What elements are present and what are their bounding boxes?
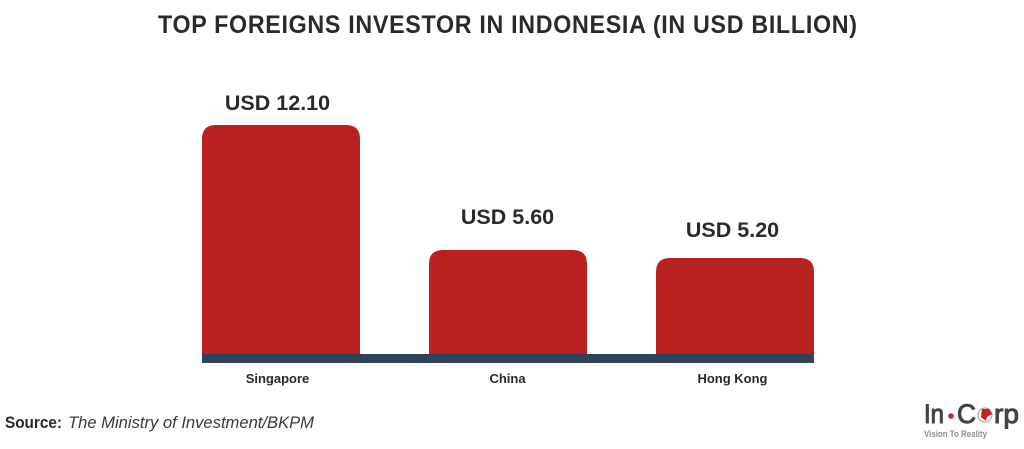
source label: Source: bbox=[5, 413, 62, 432]
value label: Singapore: USD 12.10 bbox=[225, 91, 330, 115]
logo letters rp: rp bbox=[994, 399, 1019, 429]
logo letter C: C bbox=[957, 399, 976, 429]
icon: globe bbox=[978, 408, 992, 422]
source name: The Ministry of Investment/BKPM bbox=[68, 413, 315, 432]
source note bbox=[5, 413, 315, 432]
logo: InCorp bbox=[924, 399, 1019, 440]
logo red dot bbox=[948, 413, 954, 419]
logo tagline: Vision To Reality bbox=[924, 429, 988, 440]
logo letters In: In bbox=[924, 399, 944, 429]
value label: Hong Kong: USD 5.20 bbox=[686, 218, 779, 242]
axis baseline bbox=[202, 354, 814, 363]
bar: China bbox=[429, 250, 587, 354]
category label: China: China bbox=[489, 371, 526, 386]
category label: Hong Kong: Hong Kong bbox=[697, 371, 768, 386]
title: TOP FOREIGNS INVESTOR IN INDONESIA (IN USD BILLION) bbox=[158, 11, 857, 39]
bar chart bbox=[202, 91, 814, 386]
bar: Singapore bbox=[202, 125, 360, 354]
bar: Hong Kong bbox=[656, 258, 814, 354]
category label: Singapore: Singapore bbox=[246, 371, 309, 386]
value label: China: USD 5.60 bbox=[461, 205, 554, 229]
